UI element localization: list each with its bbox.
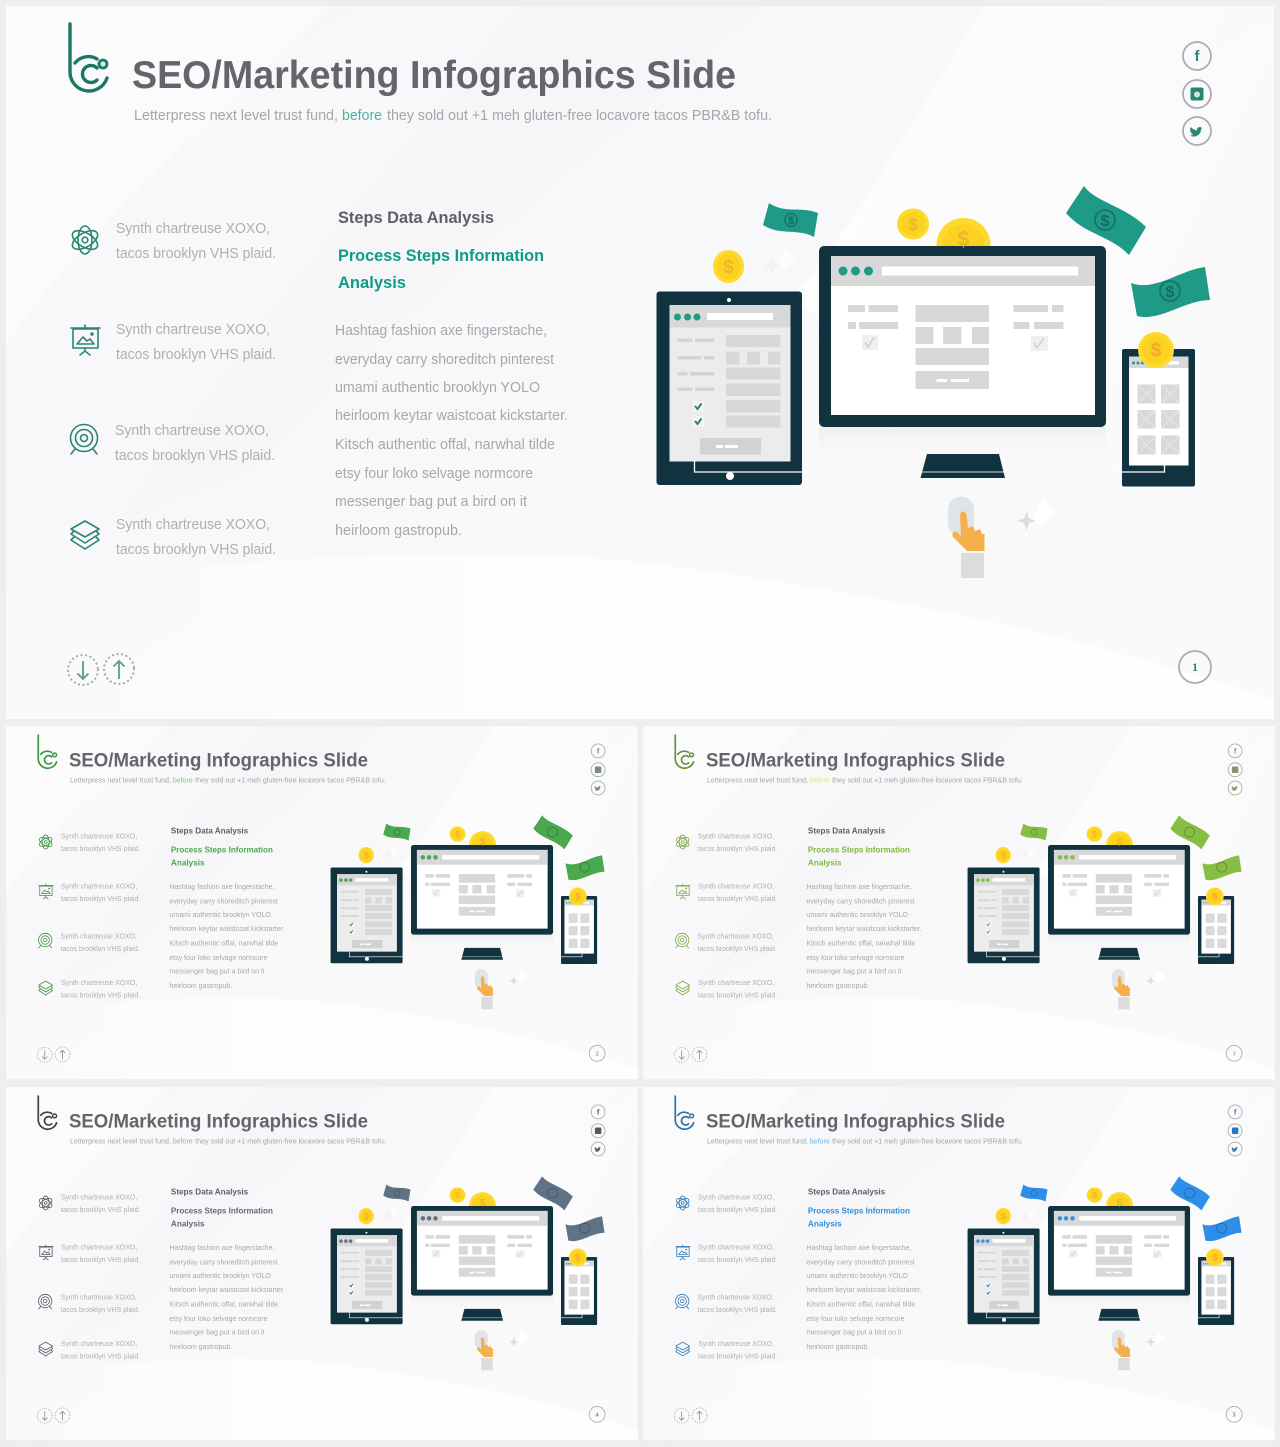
illustration: devices with money: $ xyxy=(575,1251,581,1262)
feature text 2 xyxy=(61,1243,140,1264)
heading: process steps: Process Steps Information xyxy=(808,844,910,854)
feature text 1 xyxy=(61,1193,140,1214)
feature text 4: tacos brooklyn VHS plaid. xyxy=(698,990,777,999)
icon: atom xyxy=(38,1196,53,1210)
logo xyxy=(675,735,694,768)
illustration: devices with money: $ xyxy=(1117,1198,1123,1209)
icon: target xyxy=(676,1294,689,1309)
body text: everyday carry shoreditch pinterest xyxy=(169,1258,278,1266)
body text: everyday carry shoreditch pinterest xyxy=(806,897,915,905)
icon: presentation screen xyxy=(676,884,690,899)
feature text 2: tacos brooklyn VHS plaid. xyxy=(116,346,276,363)
feature text 4 xyxy=(698,1339,777,1360)
body text: umami authentic brooklyn YOLO xyxy=(335,380,540,396)
icon: presentation screen xyxy=(39,884,53,899)
header and text content xyxy=(674,735,1023,1062)
subtitle xyxy=(707,777,1023,785)
feature text 3 xyxy=(115,422,275,464)
slide background xyxy=(643,726,1275,1079)
page number xyxy=(589,1406,605,1422)
subtitle: they sold out +1 meh gluten-free locavore tacos PBR&B tofu. xyxy=(387,108,772,124)
subtitle: before xyxy=(342,108,382,124)
page number: 1 xyxy=(1192,660,1198,674)
heading: process steps xyxy=(171,844,273,868)
feature text 3 xyxy=(698,932,777,953)
subtitle: they sold out +1 meh gluten-free locavore tacos PBR&B tofu. xyxy=(195,1138,386,1146)
icon: presentation screen xyxy=(39,1245,53,1260)
coin large xyxy=(936,218,990,272)
title: SEO/Marketing Infographics Slide xyxy=(706,1112,1005,1133)
social icon: twitter xyxy=(1183,117,1211,145)
page number: 5 xyxy=(1233,1412,1236,1418)
monitor xyxy=(819,246,1106,478)
social icon: facebook: f xyxy=(1194,48,1200,65)
feature text 2: Synth chartreuse XOXO, xyxy=(61,882,137,891)
icon: layers xyxy=(39,981,53,995)
body text: umami authentic brooklyn YOLO xyxy=(806,1272,908,1280)
icon: layers xyxy=(39,1342,53,1356)
heading: process steps: Analysis xyxy=(808,858,842,868)
page number xyxy=(1179,651,1211,683)
subtitle xyxy=(707,1138,1023,1146)
tablet xyxy=(656,292,1122,485)
banknote right xyxy=(1131,267,1210,317)
heading: process steps xyxy=(808,1205,910,1229)
button: up arrow xyxy=(55,1047,70,1062)
title: SEO/Marketing Infographics Slide xyxy=(69,1112,368,1133)
feature text 3 xyxy=(61,932,140,953)
body text: Hashtag fashion axe fingerstache, xyxy=(169,883,274,891)
heading: process steps: Process Steps Information xyxy=(808,1205,910,1215)
feature text 4 xyxy=(61,1339,140,1360)
button: down arrow xyxy=(68,655,98,685)
icon: target xyxy=(70,424,98,454)
subtitle: Letterpress next level trust fund, xyxy=(707,777,808,785)
heading: process steps: Process Steps Information xyxy=(171,1205,273,1215)
body text xyxy=(169,1244,285,1351)
dollar signs: $ xyxy=(908,215,918,234)
body text: umami authentic brooklyn YOLO xyxy=(169,1272,271,1280)
social icon: facebook xyxy=(1183,42,1211,70)
subtitle: Letterpress next level trust fund, xyxy=(70,777,171,785)
body text: messenger bag put a bird on it xyxy=(806,1329,901,1337)
button: up arrow xyxy=(692,1047,707,1062)
feature text 1: Synth chartreuse XOXO, xyxy=(698,832,774,841)
body text xyxy=(806,883,922,990)
button: up arrow xyxy=(104,654,134,684)
social icons xyxy=(1228,1105,1242,1156)
feature text 3: Synth chartreuse XOXO, xyxy=(61,932,137,941)
page number: 3 xyxy=(1233,1051,1236,1057)
panel: slide 5 blue xyxy=(643,1087,1275,1440)
panel: slide 4 grey xyxy=(6,1087,638,1440)
heading: process steps: Analysis xyxy=(171,858,205,868)
feature text 3: Synth chartreuse XOXO, xyxy=(61,1293,137,1302)
social icons xyxy=(591,1105,605,1156)
body text xyxy=(169,883,285,990)
dollar signs: $ xyxy=(1101,213,1110,230)
icon: atom xyxy=(38,835,53,849)
body text: heirloom gastropub. xyxy=(169,982,232,990)
subtitle: Letterpress next level trust fund, xyxy=(707,1138,808,1146)
illustration: devices with money: $ xyxy=(1212,1251,1218,1262)
coin on phone xyxy=(1138,332,1174,368)
feature text 4 xyxy=(698,978,777,999)
subtitle: before xyxy=(810,777,830,785)
panel: main slide 1 xyxy=(6,6,1274,719)
slide background xyxy=(6,1087,638,1440)
banknote left xyxy=(763,203,818,237)
page number xyxy=(589,1045,605,1061)
heading: steps data analysis: Steps Data Analysis xyxy=(808,826,885,836)
coin small xyxy=(897,208,929,240)
subtitle: before xyxy=(173,1138,193,1146)
feature text 2: tacos brooklyn VHS plaid. xyxy=(698,1255,777,1264)
dollar signs: $ xyxy=(958,228,970,251)
icon: target xyxy=(39,1294,52,1309)
feature text 4: tacos brooklyn VHS plaid. xyxy=(61,990,140,999)
panel: slide 2 green xyxy=(6,726,638,1079)
feature text 4: Synth chartreuse XOXO, xyxy=(116,516,270,533)
body text: Hashtag fashion axe fingerstache, xyxy=(169,1244,274,1252)
feature text 2 xyxy=(61,882,140,903)
button: down arrow xyxy=(37,1408,52,1423)
button: up arrow xyxy=(692,1408,707,1423)
heading: process steps: Analysis xyxy=(808,1219,842,1229)
body text: heirloom gastropub. xyxy=(169,1343,232,1351)
feature text 3: Synth chartreuse XOXO, xyxy=(698,1293,774,1302)
dollar signs: $ xyxy=(1151,340,1162,361)
button: down arrow xyxy=(674,1408,689,1423)
heading: process steps: Process Steps Information xyxy=(338,246,544,265)
heading: process steps: Process Steps Information xyxy=(171,844,273,854)
social icons xyxy=(1228,744,1242,795)
dollar signs: $ xyxy=(723,257,734,278)
body text: heirloom gastropub. xyxy=(806,982,869,990)
icon: layers xyxy=(676,1342,690,1356)
feature text 4: tacos brooklyn VHS plaid. xyxy=(61,1351,140,1360)
body text: messenger bag put a bird on it xyxy=(169,968,264,976)
subtitle: Letterpress next level trust fund, xyxy=(70,1138,171,1146)
body text: heirloom keytar waistcoat kickstarter. xyxy=(806,1286,922,1294)
sparkle left xyxy=(764,248,796,274)
feature text 4 xyxy=(116,516,276,558)
title: SEO/Marketing Infographics Slide xyxy=(132,54,736,97)
heading: steps data analysis: Steps Data Analysis xyxy=(808,1187,885,1197)
feature text 3 xyxy=(61,1293,140,1314)
feature text 2: Synth chartreuse XOXO, xyxy=(698,1243,774,1252)
subtitle: before xyxy=(173,777,193,785)
feature text 4: Synth chartreuse XOXO, xyxy=(61,978,137,987)
phone xyxy=(1122,349,1195,486)
title: SEO/Marketing Infographics Slide xyxy=(706,751,1005,772)
header and text content xyxy=(37,735,386,1062)
body text: etsy four loko selvage normcore xyxy=(335,466,533,482)
body text: heirloom gastropub. xyxy=(335,523,462,539)
icon: atom xyxy=(69,226,101,254)
dollar signs: $ xyxy=(788,215,794,227)
body text: heirloom keytar waistcoat kickstarter. xyxy=(169,925,285,933)
feature text 2: tacos brooklyn VHS plaid. xyxy=(61,1255,140,1264)
feature text 1: Synth chartreuse XOXO, xyxy=(116,220,270,237)
logo xyxy=(675,1096,694,1129)
feature text 3: tacos brooklyn VHS plaid. xyxy=(61,944,140,953)
illustration: devices with money: $ xyxy=(455,829,460,839)
heading: steps data analysis: Steps Data Analysis xyxy=(171,826,248,836)
icon: layers xyxy=(676,981,690,995)
feature text 3: Synth chartreuse XOXO, xyxy=(698,932,774,941)
feature text 3: tacos brooklyn VHS plaid. xyxy=(61,1305,140,1314)
body text: Kitsch authentic offal, narwhal tilde xyxy=(335,437,555,453)
body text: heirloom keytar waistcoat kickstarter. xyxy=(806,925,922,933)
slide background xyxy=(6,6,1274,719)
illustration: devices with money: $ xyxy=(455,1190,460,1200)
social icons: f xyxy=(1234,1107,1237,1116)
page number xyxy=(1226,1045,1242,1061)
feature text 3: tacos brooklyn VHS plaid. xyxy=(115,447,275,464)
body text: everyday carry shoreditch pinterest xyxy=(335,352,554,368)
social icons xyxy=(591,744,605,795)
feature text 2 xyxy=(698,882,777,903)
body text: messenger bag put a bird on it xyxy=(169,1329,264,1337)
icon: target xyxy=(676,933,689,948)
body text: etsy four loko selvage normcore xyxy=(806,1315,904,1323)
feature text 1: tacos brooklyn VHS plaid. xyxy=(698,1205,777,1214)
feature text 4: Synth chartreuse XOXO, xyxy=(698,1339,774,1348)
page number xyxy=(1226,1406,1242,1422)
body text: etsy four loko selvage normcore xyxy=(806,954,904,962)
slide background xyxy=(6,726,638,1079)
illustration: devices with money: $ xyxy=(1092,1190,1097,1200)
sparkle right xyxy=(1017,500,1055,530)
button: down arrow xyxy=(674,1047,689,1062)
feature text 3: tacos brooklyn VHS plaid. xyxy=(698,1305,777,1314)
body text: messenger bag put a bird on it xyxy=(335,494,527,510)
feature text 1: tacos brooklyn VHS plaid. xyxy=(698,844,777,853)
body text: heirloom gastropub. xyxy=(806,1343,869,1351)
feature text 1: Synth chartreuse XOXO, xyxy=(61,1193,137,1202)
body text: heirloom keytar waistcoat kickstarter. xyxy=(169,1286,285,1294)
feature text 1 xyxy=(61,832,140,853)
feature text 4 xyxy=(61,978,140,999)
panel: slide 3 light green xyxy=(643,726,1275,1079)
social icon: instagram xyxy=(1183,80,1211,108)
illustration: devices with money: $ xyxy=(575,890,581,901)
feature text 1 xyxy=(116,220,276,262)
feature text 1: Synth chartreuse XOXO, xyxy=(61,832,137,841)
body text: Hashtag fashion axe fingerstache, xyxy=(335,323,547,339)
logo xyxy=(70,24,107,91)
illustration: devices with money xyxy=(968,1176,1242,1370)
icon: presentation screen xyxy=(676,1245,690,1260)
subtitle xyxy=(70,777,386,785)
body text: heirloom keytar waistcoat kickstarter. xyxy=(335,408,568,424)
icon: presentation screen xyxy=(71,325,100,355)
illustration: devices with money xyxy=(968,815,1242,1009)
illustration: devices with money: $ xyxy=(364,1210,370,1221)
social icons: f xyxy=(597,1107,600,1116)
feature text 1: tacos brooklyn VHS plaid. xyxy=(61,1205,140,1214)
button: down arrow xyxy=(37,1047,52,1062)
subtitle: they sold out +1 meh gluten-free locavore tacos PBR&B tofu. xyxy=(195,777,386,785)
feature text 1 xyxy=(698,1193,777,1214)
social icons: f xyxy=(597,746,600,755)
illustration: devices with money: $ xyxy=(1001,1210,1007,1221)
body text: everyday carry shoreditch pinterest xyxy=(169,897,278,905)
heading: process steps: Analysis xyxy=(338,273,406,292)
body text: umami authentic brooklyn YOLO xyxy=(806,911,908,919)
feature text 4: Synth chartreuse XOXO, xyxy=(698,978,774,987)
illustration: devices with money xyxy=(656,186,1210,578)
body text xyxy=(335,323,568,539)
page number: 4 xyxy=(596,1412,599,1418)
illustration: devices with money: $ xyxy=(1212,890,1218,901)
heading: process steps: Analysis xyxy=(171,1219,205,1229)
feature text 1: tacos brooklyn VHS plaid. xyxy=(116,245,276,262)
body text: Kitsch authentic offal, narwhal tilde xyxy=(806,939,915,947)
body text: etsy four loko selvage normcore xyxy=(169,954,267,962)
illustration: devices with money xyxy=(331,1176,605,1370)
illustration: devices with money: $ xyxy=(364,849,370,860)
feature text 2 xyxy=(698,1243,777,1264)
heading: process steps xyxy=(808,844,910,868)
body text: Kitsch authentic offal, narwhal tilde xyxy=(169,1300,278,1308)
subtitle: before xyxy=(810,1138,830,1146)
feature text 2 xyxy=(116,321,276,363)
subtitle: they sold out +1 meh gluten-free locavore tacos PBR&B tofu. xyxy=(832,1138,1023,1146)
subtitle xyxy=(134,108,772,124)
title: SEO/Marketing Infographics Slide xyxy=(69,751,368,772)
illustration: devices with money xyxy=(331,815,605,1009)
dollar signs xyxy=(723,213,1175,361)
body text: messenger bag put a bird on it xyxy=(806,968,901,976)
button: up arrow xyxy=(55,1408,70,1423)
subtitle xyxy=(70,1138,386,1146)
subtitle: they sold out +1 meh gluten-free locavore tacos PBR&B tofu. xyxy=(832,777,1023,785)
feature text 1: tacos brooklyn VHS plaid. xyxy=(61,844,140,853)
feature text 2: tacos brooklyn VHS plaid. xyxy=(61,894,140,903)
feature text 2: Synth chartreuse XOXO, xyxy=(61,1243,137,1252)
feature text 2: Synth chartreuse XOXO, xyxy=(698,882,774,891)
feature text 3: tacos brooklyn VHS plaid. xyxy=(698,944,777,953)
header and text content xyxy=(674,1096,1023,1423)
heading: steps data analysis: Steps Data Analysis xyxy=(338,208,494,227)
icon: atom xyxy=(675,1196,690,1210)
header and text content xyxy=(37,1096,386,1423)
illustration: devices with money: $ xyxy=(480,837,486,848)
page number: 2 xyxy=(596,1051,599,1057)
heading: process steps xyxy=(171,1205,273,1229)
feature text 2: tacos brooklyn VHS plaid. xyxy=(698,894,777,903)
dollar signs: $ xyxy=(1166,284,1175,301)
banknote top right xyxy=(1066,186,1146,255)
illustration: devices with money: $ xyxy=(1092,829,1097,839)
feature text 4: tacos brooklyn VHS plaid. xyxy=(116,541,276,558)
coin left xyxy=(713,250,744,283)
body text: Hashtag fashion axe fingerstache, xyxy=(806,883,911,891)
icon: layers xyxy=(71,521,99,549)
body text: Kitsch authentic offal, narwhal tilde xyxy=(169,939,278,947)
feature text 2: Synth chartreuse XOXO, xyxy=(116,321,270,338)
feature text 1: Synth chartreuse XOXO, xyxy=(698,1193,774,1202)
logo xyxy=(38,1096,57,1129)
body text xyxy=(806,1244,922,1351)
illustration: devices with money: $ xyxy=(1001,849,1007,860)
logo xyxy=(38,735,57,768)
illustration: devices with money: $ xyxy=(1117,837,1123,848)
feature text 3 xyxy=(698,1293,777,1314)
hand clicking mouse xyxy=(948,496,984,578)
illustration: devices with money: $ xyxy=(480,1198,486,1209)
heading: process steps xyxy=(338,246,544,292)
feature text 4: tacos brooklyn VHS plaid. xyxy=(698,1351,777,1360)
feature text 1 xyxy=(698,832,777,853)
body text: Hashtag fashion axe fingerstache, xyxy=(806,1244,911,1252)
body text: umami authentic brooklyn YOLO xyxy=(169,911,271,919)
body text: everyday carry shoreditch pinterest xyxy=(806,1258,915,1266)
heading: steps data analysis: Steps Data Analysis xyxy=(171,1187,248,1197)
icon: target xyxy=(39,933,52,948)
body text: etsy four loko selvage normcore xyxy=(169,1315,267,1323)
body text: Kitsch authentic offal, narwhal tilde xyxy=(806,1300,915,1308)
feature text 3: Synth chartreuse XOXO, xyxy=(115,422,269,439)
subtitle: Letterpress next level trust fund, xyxy=(134,108,338,124)
icon: atom xyxy=(675,835,690,849)
social icons: f xyxy=(1234,746,1237,755)
slide background xyxy=(643,1087,1275,1440)
feature text 4: Synth chartreuse XOXO, xyxy=(61,1339,137,1348)
